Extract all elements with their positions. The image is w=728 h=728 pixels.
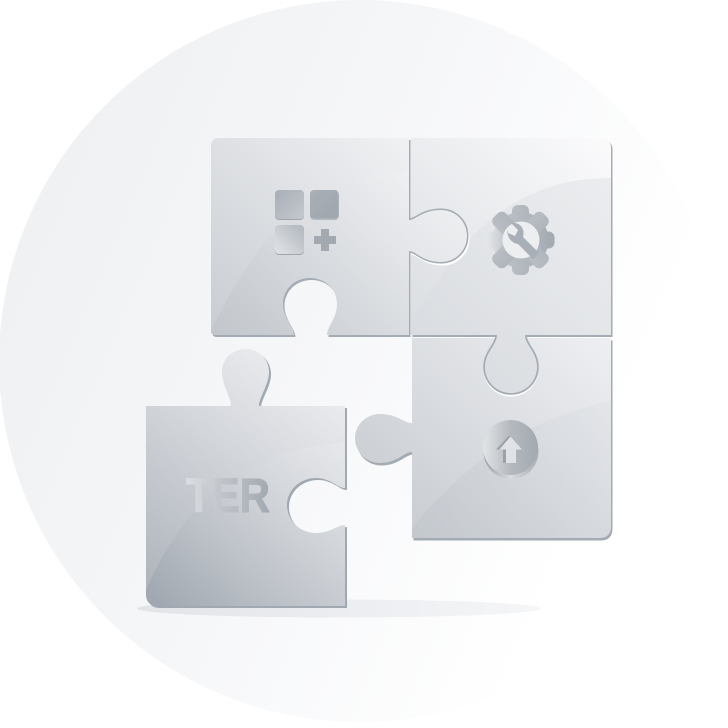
- ground shadow: [137, 600, 541, 618]
- puzzle piece: top right: [411, 138, 612, 395]
- text: TER: TER: [186, 470, 270, 523]
- puzzle piece: bottom left: [146, 349, 347, 608]
- icon: gear with wrench: [486, 205, 554, 275]
- icon: upload button: [483, 420, 538, 479]
- puzzle piece: top left: [211, 138, 468, 337]
- icon: app grid with plus: [275, 190, 339, 255]
- puzzle piece: bottom right: [355, 338, 612, 540]
